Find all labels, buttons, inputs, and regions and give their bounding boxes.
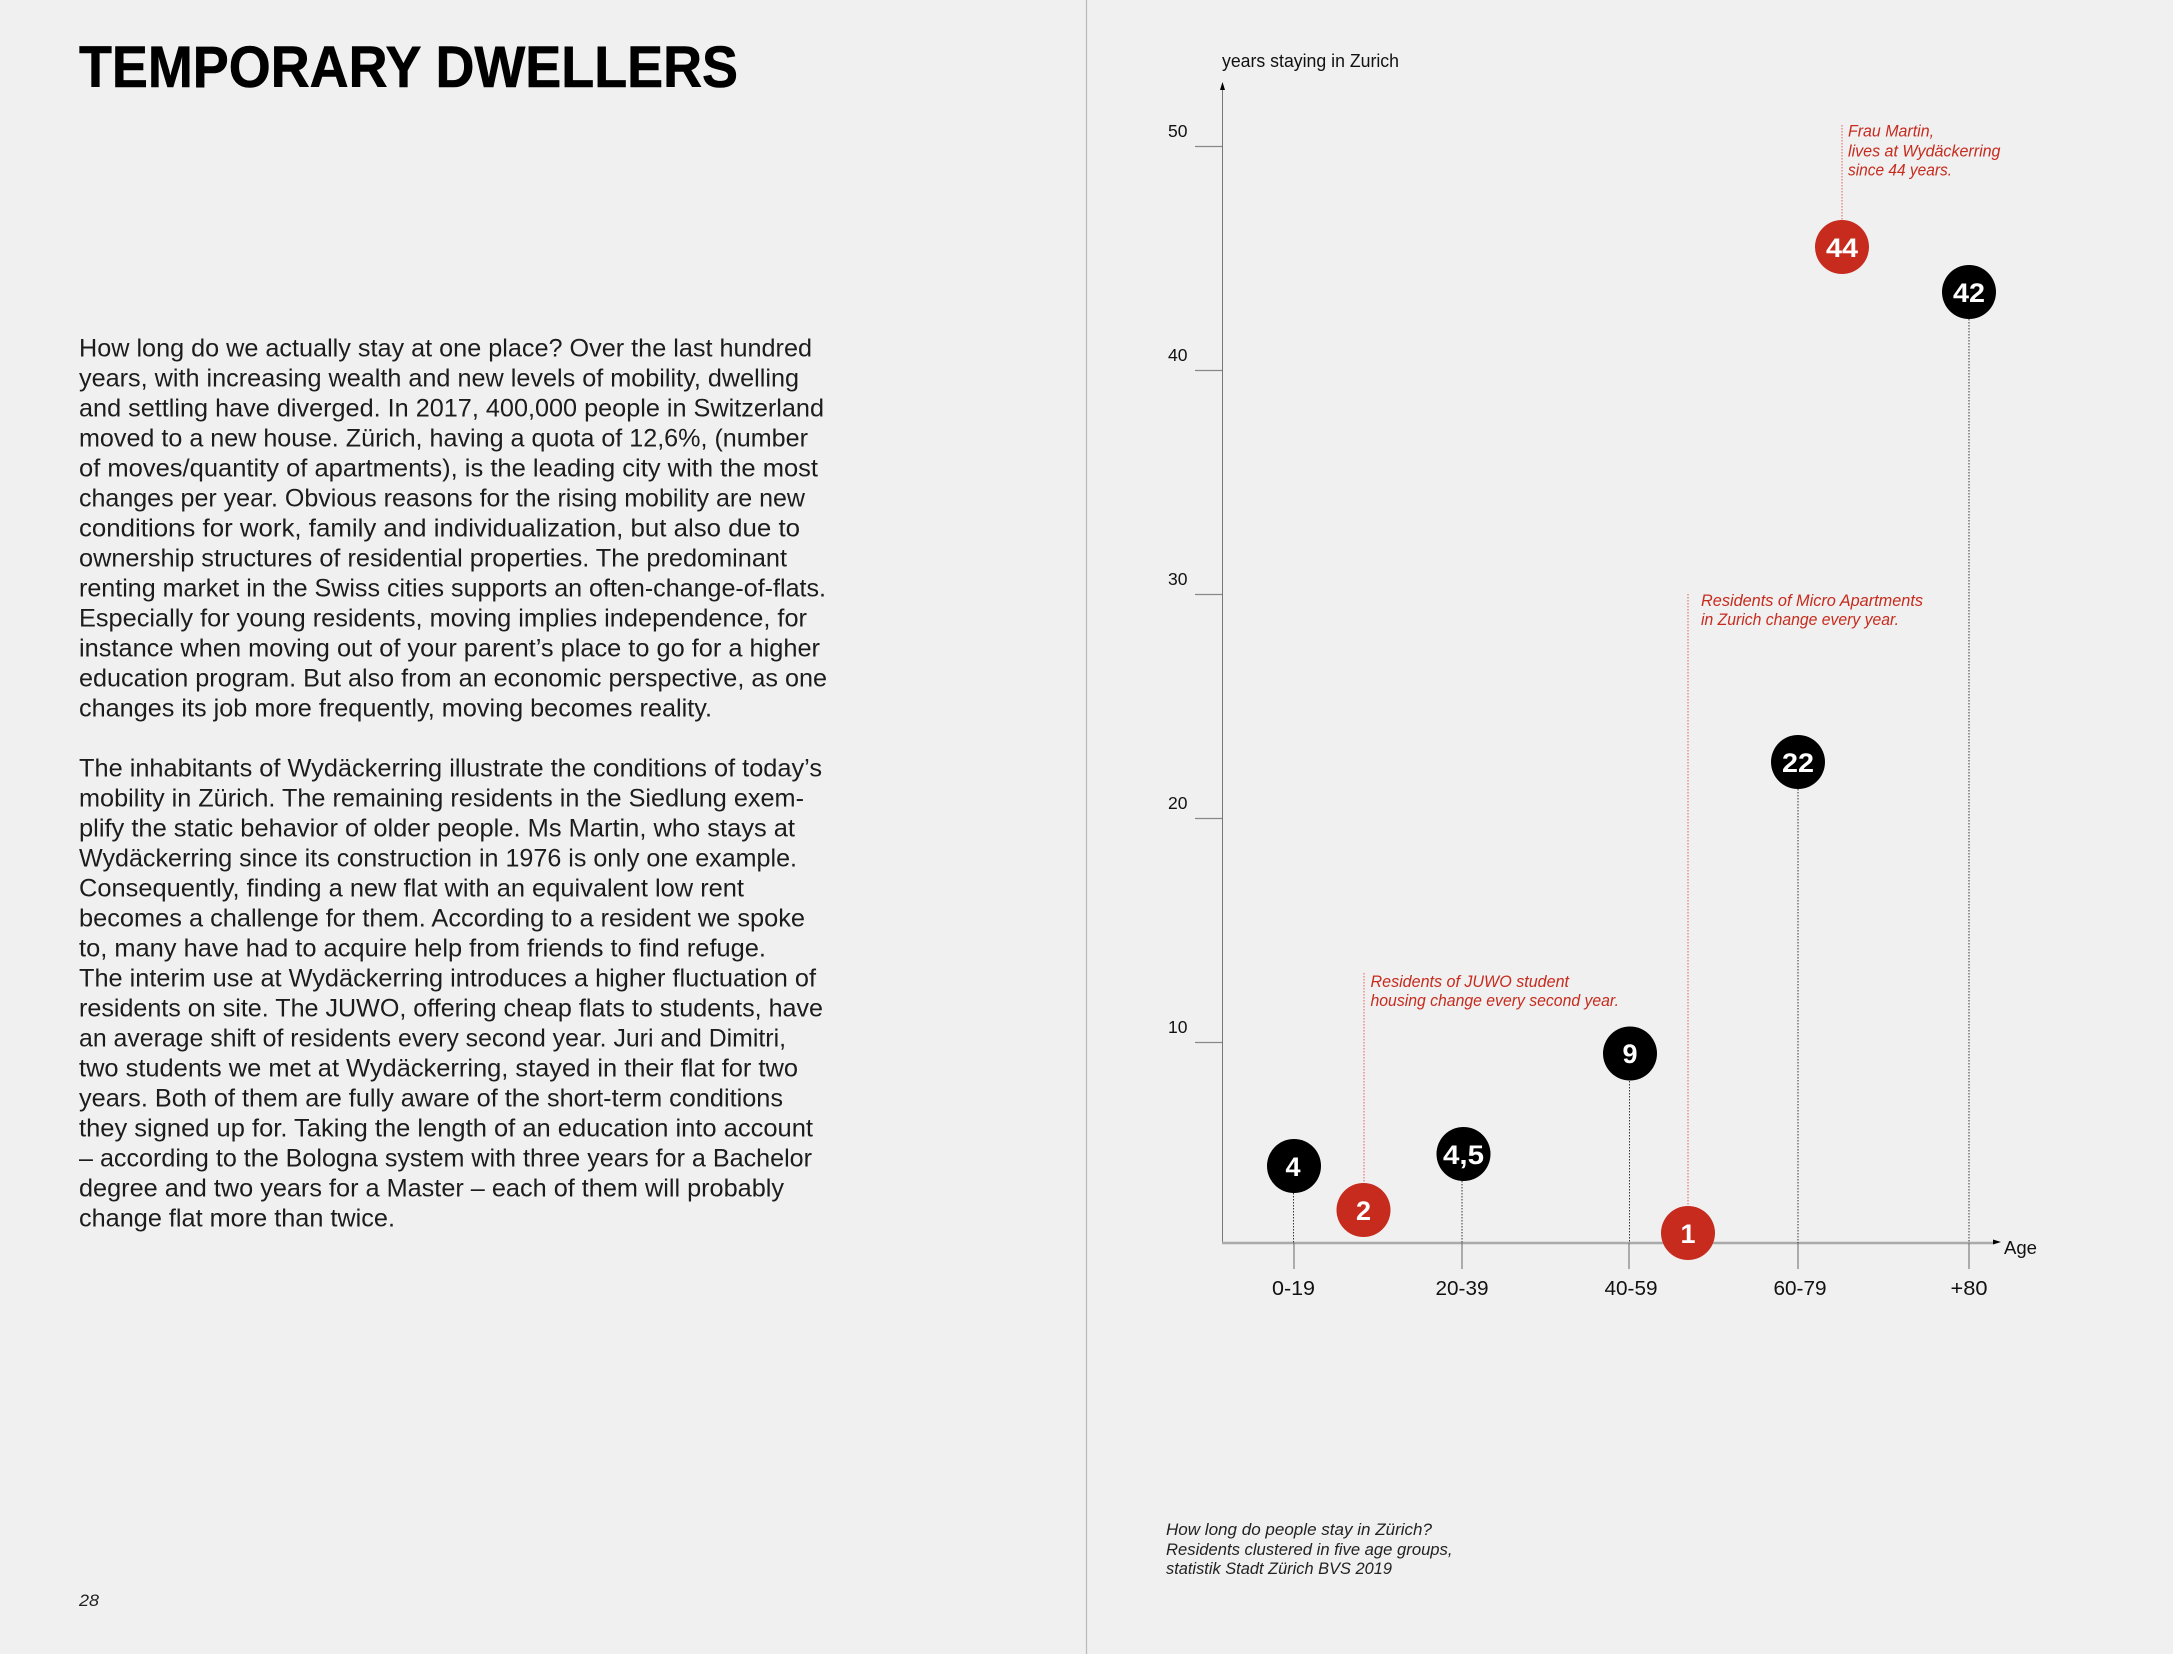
x axis labels: 20-39 — [1436, 1278, 1488, 1300]
page number: 28 — [78, 1591, 100, 1610]
data point: +80, 42 years: 42 — [1953, 278, 1985, 308]
data point: +80, 42 years — [1942, 265, 1996, 319]
callout: JUWO student housing — [1370, 973, 1619, 1010]
red callout stems — [1364, 125, 1842, 1208]
callout: Frau Martin — [1848, 122, 2001, 180]
chart caption — [1166, 1520, 1452, 1578]
black stems — [1294, 316, 1969, 1243]
x axis labels: 0-19 — [1272, 1278, 1315, 1300]
x axis labels: 60-79 — [1774, 1278, 1826, 1300]
y axis labels: 50 — [1168, 121, 1188, 141]
x axis ticks — [1294, 1243, 1969, 1269]
x axis with arrow — [1222, 1240, 2001, 1244]
text block: first paragraph: changes its job more frequently, moving becomes reality. — [79, 694, 712, 722]
text block: second paragraph — [79, 754, 823, 1232]
callout: JUWO student housing: Residents of JUWO student — [1370, 973, 1570, 991]
data point: 0-19, 4 years: 4 — [1285, 1152, 1301, 1182]
text block: second paragraph: Consequently, finding a new flat with an equivalent low rent — [79, 874, 744, 902]
callout: Frau Martin: lives at Wydäckerring — [1848, 142, 2001, 160]
data point: JUWO, 2 years: 2 — [1356, 1196, 1371, 1226]
data point: 60-79, 22 years — [1771, 735, 1825, 789]
text block: second paragraph: The inhabitants of Wydäckerring illustrate the conditions of today’s — [79, 754, 822, 782]
callout: Micro Apartments: in Zurich change every year. — [1701, 611, 1899, 629]
text block: second paragraph: – according to the Bologna system with three years for a Bachelor — [79, 1144, 812, 1172]
callout: Micro Apartments: Residents of Micro Apartments — [1701, 592, 1923, 610]
data point: 20-39, 4,5 years — [1436, 1127, 1490, 1181]
data point: 40-59, 9 years — [1603, 1026, 1657, 1080]
y axis labels: 40 — [1168, 345, 1188, 365]
data point: Frau Martin, 44 years: 44 — [1826, 233, 1858, 263]
text block: first paragraph: and settling have diverged. In 2017, 400,000 people in Switzerland — [79, 394, 824, 422]
y axis labels: 30 — [1168, 569, 1188, 589]
text block: second paragraph: degree and two years for a Master – each of them will probably — [79, 1174, 784, 1202]
text block: second paragraph: they signed up for. Taking the length of an education into account — [79, 1114, 813, 1142]
text block: first paragraph: How long do we actually stay at one place? Over the last hundred — [79, 334, 812, 362]
chart caption: statistik Stadt Zürich BVS 2019 — [1166, 1559, 1393, 1578]
data point: 40-59, 9 years: 9 — [1622, 1039, 1638, 1069]
data point: Micro Apartments, 1 year — [1661, 1206, 1715, 1260]
y axis labels: 10 — [1168, 1017, 1188, 1037]
y axis ticks — [1195, 146, 1222, 1042]
chart: years staying in Zurich by age group — [1168, 51, 2037, 1300]
text block: second paragraph: residents on site. The JUWO, offering cheap flats to students, have — [79, 994, 823, 1022]
data point: Frau Martin, 44 years — [1815, 220, 1869, 274]
text block: first paragraph: renting market in the Swiss cities supports an often-change-of-flats. — [79, 574, 826, 602]
y axis title: years staying in Zurich — [1222, 51, 1399, 71]
text block: first paragraph — [79, 334, 827, 722]
x axis title: Age — [2004, 1238, 2037, 1258]
callout: Micro Apartments — [1701, 592, 1923, 629]
callout: Frau Martin: Frau Martin, — [1848, 122, 1934, 140]
text block: first paragraph: of moves/quantity of apartments), is the leading city with the most — [79, 454, 818, 482]
text block: second paragraph: change flat more than twice. — [79, 1204, 395, 1232]
data point: 20-39, 4,5 years: 4,5 — [1443, 1140, 1484, 1170]
text block: second paragraph: Wydäckerring since its construction in 1976 is only one example. — [79, 844, 797, 872]
y axis labels — [1168, 121, 1188, 1037]
title: TEMPORARY DWELLERS — [79, 35, 738, 100]
text block: first paragraph: education program. But also from an economic perspective, as one — [79, 664, 827, 692]
text block: second paragraph: mobility in Zürich. The remaining residents in the Siedlung exem- — [79, 784, 804, 812]
y axis labels: 20 — [1168, 793, 1188, 813]
data point: 0-19, 4 years — [1267, 1139, 1321, 1193]
text block: second paragraph: becomes a challenge for them. According to a resident we spoke — [79, 904, 805, 932]
data point: Micro Apartments, 1 year: 1 — [1680, 1219, 1696, 1249]
text block: first paragraph: instance when moving out of your parent’s place to go for a higher — [79, 634, 820, 662]
data point: JUWO, 2 years — [1336, 1183, 1390, 1237]
text block: first paragraph: conditions for work, family and individualization, but also due to — [79, 514, 800, 542]
text block: second paragraph: years. Both of them are fully aware of the short-term conditions — [79, 1084, 783, 1112]
text block: second paragraph: The interim use at Wydäckerring introduces a higher fluctuation of — [79, 964, 816, 992]
text block: second paragraph: two students we met at Wydäckerring, stayed in their flat for two — [79, 1054, 798, 1082]
text block: second paragraph: plify the static behavior of older people. Ms Martin, who stays at — [79, 814, 795, 842]
text block: first paragraph: years, with increasing wealth and new levels of mobility, dwelling — [79, 364, 799, 392]
x axis labels — [1272, 1278, 1988, 1300]
chart caption: Residents clustered in five age groups, — [1166, 1540, 1452, 1559]
text block: first paragraph: Especially for young residents, moving implies independence, for — [79, 604, 807, 632]
y axis with arrow — [1220, 82, 1225, 1243]
text block: first paragraph: ownership structures of residential properties. The predominant — [79, 544, 787, 572]
callout: Frau Martin: since 44 years. — [1848, 162, 1952, 180]
text block: first paragraph: moved to a new house. Zürich, having a quota of 12,6%, (number — [79, 424, 808, 452]
text block: second paragraph: to, many have had to acquire help from friends to find refuge. — [79, 934, 766, 962]
callout: JUWO student housing: housing change every second year. — [1370, 992, 1619, 1010]
x axis labels: 40-59 — [1604, 1278, 1658, 1300]
text block: first paragraph: changes per year. Obvious reasons for the rising mobility are new — [79, 484, 806, 512]
text block: second paragraph: an average shift of residents every second year. Juri and Dimitri, — [79, 1024, 786, 1052]
chart caption: How long do people stay in Zürich? — [1166, 1520, 1433, 1539]
x axis labels: +80 — [1950, 1278, 1988, 1300]
data point: 60-79, 22 years: 22 — [1782, 748, 1814, 778]
